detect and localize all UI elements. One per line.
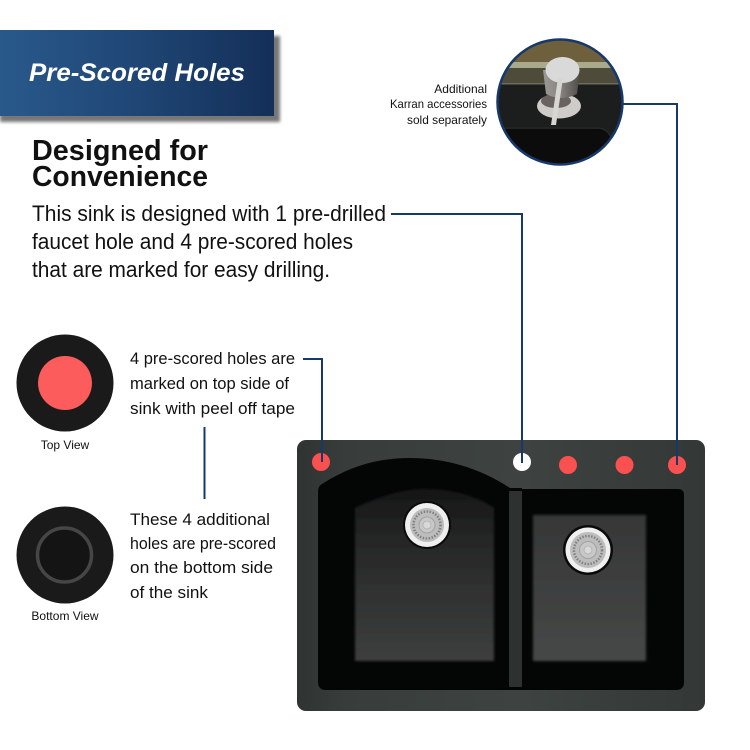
bottom side text: holes are pre-scored [130,534,276,553]
right drain [563,525,613,575]
banner [0,30,280,122]
arrow: paragraph to faucet hole [391,214,522,463]
bottom side text: on the bottom side [130,558,273,577]
sink deck [297,440,705,711]
heading: Convenience [32,161,208,193]
basin divider [509,491,522,687]
callout: top view: Top View [41,438,90,452]
heading: Designed for [32,135,208,167]
left basin floor [355,489,494,661]
connector lines [204,104,677,499]
top side text: sink with peel off tape [130,399,295,418]
arrow: accessory to right hole [623,104,677,465]
accessory note [390,82,487,127]
left drain [403,501,451,549]
accessory note: sold separately [407,113,487,127]
callout: bottom view: Bottom View [31,609,99,623]
top side text [130,349,295,418]
bottom side text [130,510,276,602]
accessory photo: soap dispenser [495,38,625,168]
callout: bottom view [16,506,114,623]
intro paragraph: This sink is designed with 1 pre-drilled [32,201,386,226]
pre-scored holes and faucet hole [312,453,686,474]
intro paragraph [32,201,386,282]
right basin [522,489,684,690]
intro paragraph: faucet hole and 4 pre-scored holes [32,229,353,254]
callout: top view [16,334,114,452]
sink [297,440,705,711]
top side text: 4 pre-scored holes are [130,349,295,368]
right basin floor [533,515,646,661]
left basin [318,458,522,690]
banner title: Pre-Scored Holes [29,59,245,87]
accessory note: Karran accessories [390,97,487,111]
bottom side text: of the sink [130,583,208,602]
top side text: marked on top side of [130,374,289,393]
intro paragraph: that are marked for easy drilling. [32,257,330,282]
accessory note: Additional [434,82,487,96]
arrow: top text to left hole [303,359,322,462]
bottom side text: These 4 additional [130,510,270,529]
arrow: top text to bottom text [204,427,206,499]
heading [32,135,208,193]
